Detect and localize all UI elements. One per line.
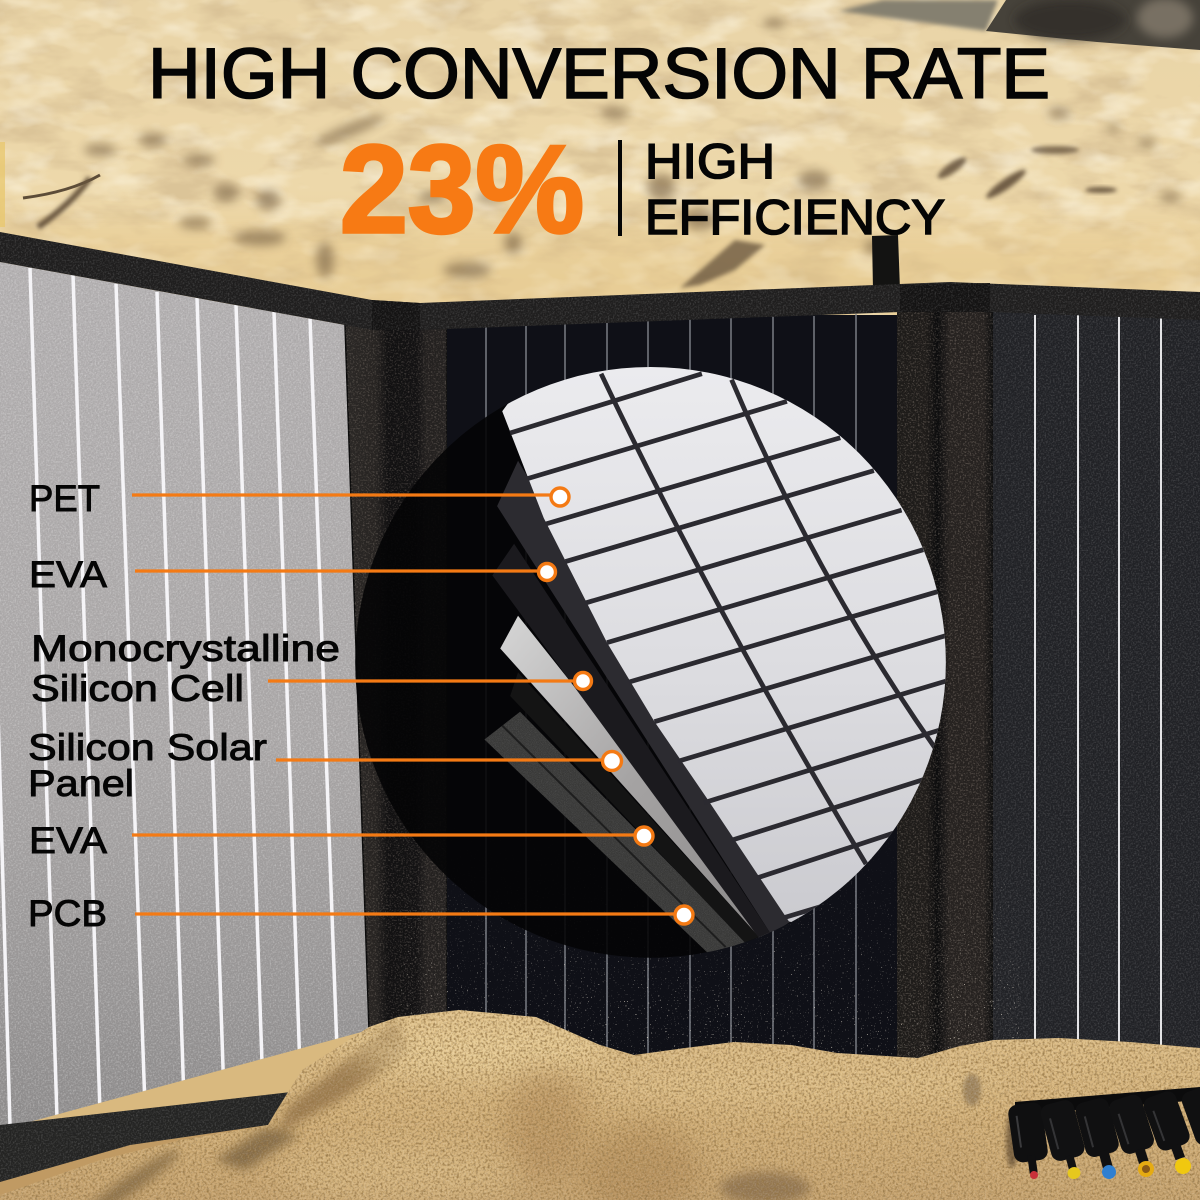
callout: Silicon Solar Panel <box>28 727 622 804</box>
callout: PET: PET <box>29 478 100 519</box>
dark lens disc <box>355 367 946 958</box>
callout: EVA <box>29 554 556 595</box>
big stat: 23%: 23% <box>340 121 584 259</box>
sand speckles on the dark panels <box>400 820 1020 1070</box>
foreground sand mound <box>0 1005 1200 1200</box>
panel bottom fabric edge <box>0 1092 288 1182</box>
sand under the lower fabric edge <box>0 1110 320 1200</box>
cross-section circle with layered panel <box>355 350 983 959</box>
panel: top fabric edge with handle <box>0 232 1200 330</box>
callout: EVA lower <box>29 820 653 861</box>
stat caption: high efficiency: EFFICIENCY <box>645 191 945 245</box>
divider <box>618 140 622 236</box>
layer: silicon solar panel <box>500 616 770 937</box>
layer: PET edge <box>497 461 791 934</box>
stat caption: high efficiency: HIGH <box>645 135 775 189</box>
layer: PCB <box>480 706 753 959</box>
panel: left fold frame <box>345 325 447 1045</box>
layer: upper EVA <box>492 544 771 938</box>
title: HIGH CONVERSION RATE <box>148 35 1050 114</box>
callout: Monocrystalline Silicon Cell: Monocrystalline <box>31 628 340 669</box>
callout: Monocrystalline Silicon Cell <box>31 628 592 709</box>
panel: central dark solar panel <box>447 314 899 1060</box>
callout: PCB: PCB <box>28 893 107 934</box>
background: sand dunes above the panel <box>0 0 1200 340</box>
layer: monocrystalline cell face <box>502 367 946 922</box>
panel: left grey solar panel <box>0 250 380 1130</box>
panel: right fold frame <box>897 310 993 1060</box>
stat caption: high efficiency <box>645 135 945 245</box>
callout: Silicon Solar Panel: Panel <box>28 763 134 804</box>
callout: PCB <box>28 893 693 934</box>
callout: Monocrystalline Silicon Cell: Silicon Cell <box>31 668 244 709</box>
callout: Silicon Solar Panel: Silicon Solar <box>28 727 267 768</box>
panel: right dark solar panel <box>993 312 1200 1057</box>
callout: EVA: EVA <box>29 554 107 595</box>
shadow and rock top right <box>839 0 1200 50</box>
layer: lower EVA <box>510 672 759 943</box>
icon: connector tips on the sand <box>1006 1084 1200 1183</box>
callout: EVA lower: EVA <box>29 820 107 861</box>
callout: PET <box>29 478 569 519</box>
